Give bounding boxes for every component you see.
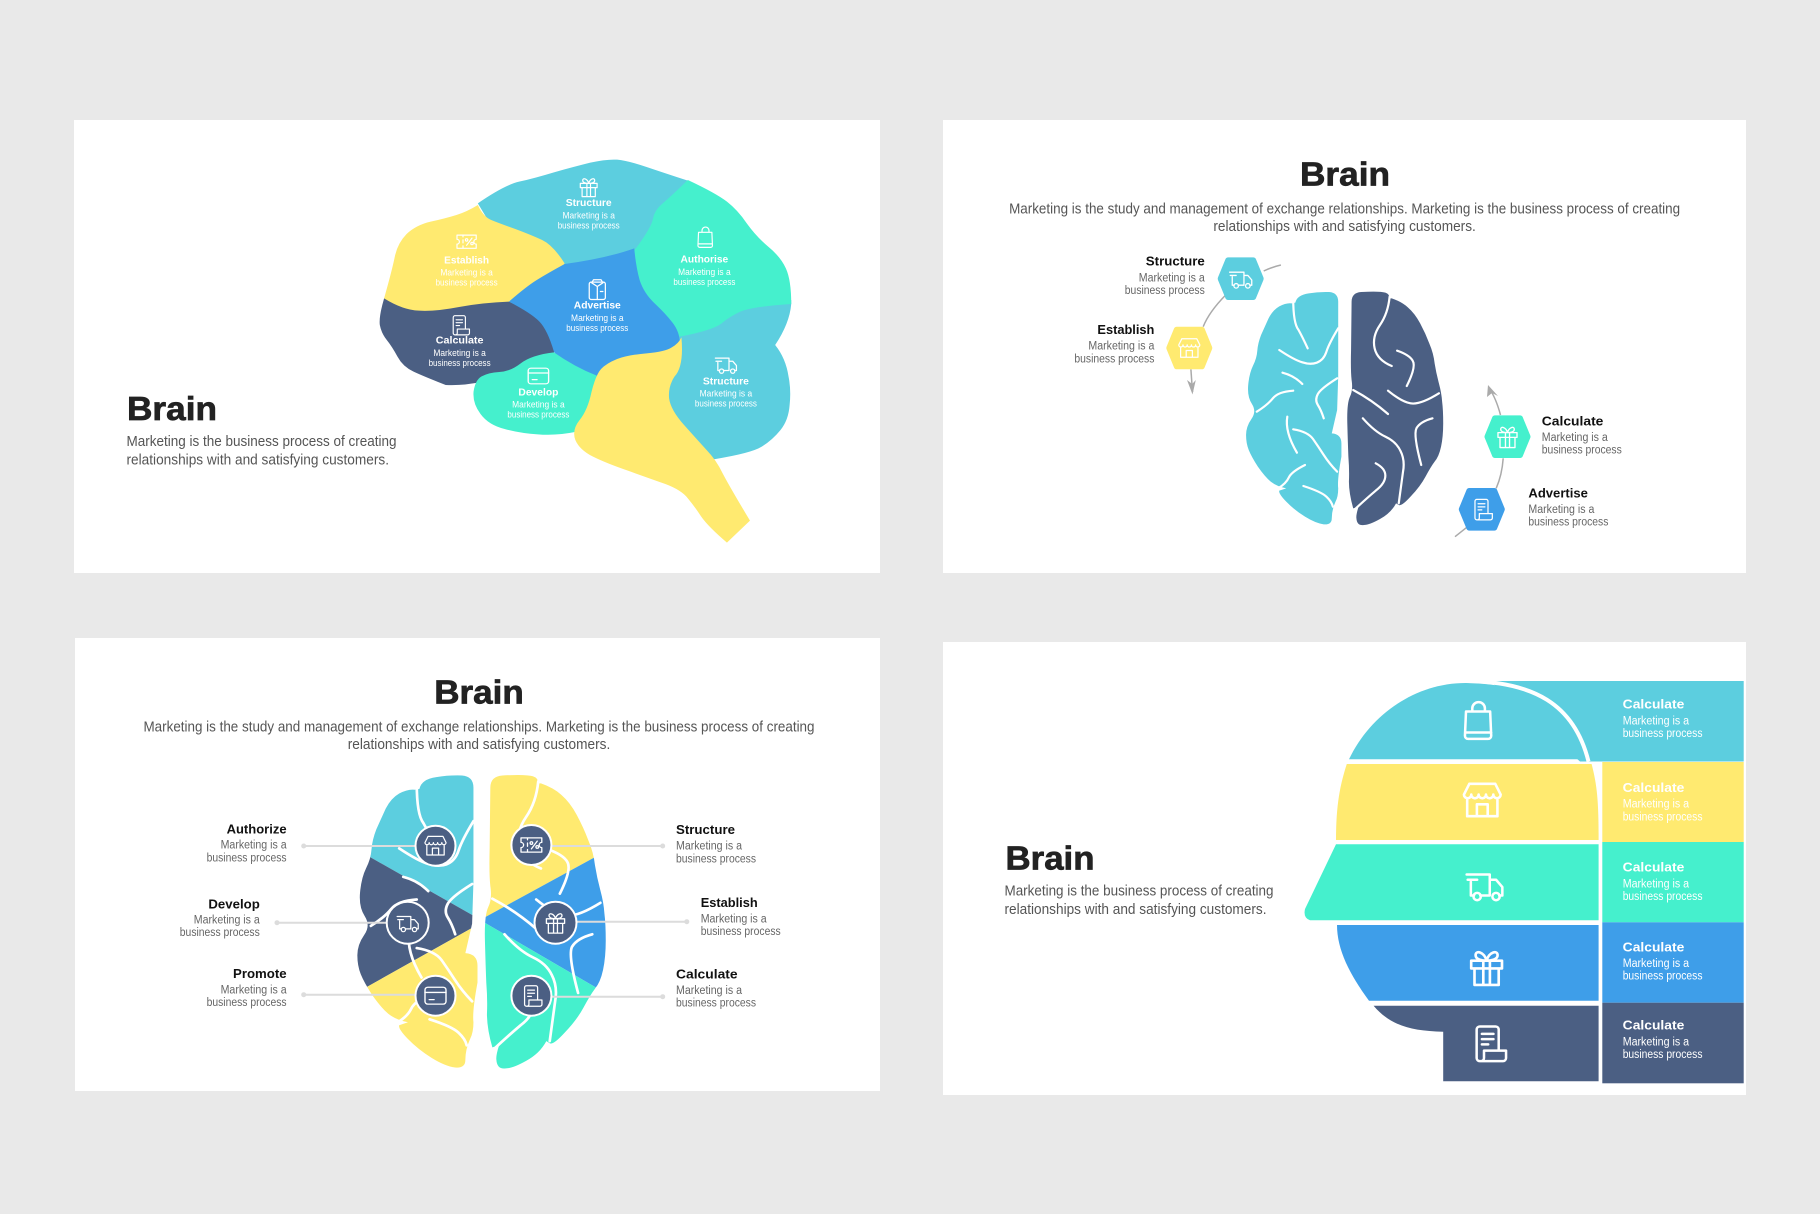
brain folds [371, 781, 600, 1047]
description [126, 434, 396, 468]
segment: Structure top: Structure [566, 197, 612, 209]
segment: Advertise: Advertise [574, 300, 621, 312]
icon: store [1464, 784, 1501, 816]
description: Marketing is the business process of creating [126, 434, 396, 450]
head band: yellow [1336, 764, 1599, 840]
segment: Establish: Establish [444, 254, 489, 266]
icon: scroll [1477, 1026, 1506, 1061]
icon: gift [1471, 952, 1502, 985]
segment: Authorise [673, 227, 736, 287]
text: block 4 [1623, 939, 1703, 983]
description [1009, 202, 1680, 235]
hexagon: Advertise scroll [1462, 491, 1502, 528]
label: Develop: Develop [208, 896, 260, 911]
label: Promote: Promote [233, 966, 287, 981]
label: Calculate [1542, 413, 1622, 457]
label: Promote: business process [207, 997, 287, 1009]
head band: blue [1337, 925, 1599, 1001]
text: block 2: business process [1623, 811, 1703, 823]
label: Establish: business process [701, 926, 781, 938]
head band: green [1305, 844, 1599, 920]
hexagon: Structure truck [1221, 260, 1261, 297]
label: Authorize: Marketing is a [221, 840, 287, 852]
label: Calculate: Calculate [1542, 413, 1603, 428]
segment: Authorise: Marketing is a [678, 267, 731, 277]
icon badge: gift [534, 902, 576, 944]
label: Develop [180, 896, 260, 939]
segment: Authorise: Authorise [681, 254, 728, 266]
label: Establish: Establish [701, 895, 758, 910]
label: Promote: Marketing is a [221, 984, 287, 996]
segment: Structure top: Marketing is a [562, 210, 615, 220]
label: Establish: Establish [1097, 322, 1154, 337]
label: Advertise [1528, 485, 1609, 529]
brain top view [1246, 292, 1443, 525]
label: Authorize [207, 821, 287, 864]
label: Calculate: business process [1542, 445, 1622, 457]
text: block 5: Marketing is a [1623, 1036, 1690, 1048]
icon: truck [1467, 874, 1502, 900]
text: block 2: Calculate [1623, 780, 1684, 795]
segment: Structure right: Structure [703, 375, 749, 387]
icon: bag [1465, 702, 1491, 739]
description: relationships with and satisfying customers. [1004, 902, 1266, 918]
icon badge: truck [387, 902, 429, 944]
segment: Structure right: Marketing is a [700, 389, 752, 399]
label: Structure: business process [1125, 285, 1205, 297]
icon badge: store [416, 826, 456, 866]
text: block 4: business process [1623, 971, 1703, 983]
text: block 5: business process [1623, 1049, 1703, 1061]
text: block 4: Calculate [1623, 939, 1684, 954]
label: Structure [676, 822, 756, 865]
segment: Establish: Marketing is a [440, 268, 493, 278]
text: block 5 [1623, 1018, 1703, 1061]
label: Authorize: Authorize [227, 821, 287, 836]
text: block 1: Marketing is a [1623, 715, 1690, 727]
segment: Calculate: business process [429, 358, 491, 368]
icon badge: scroll [511, 976, 551, 1016]
segment: Develop: business process [507, 410, 570, 420]
label: Promote [207, 966, 287, 1009]
text: block 3: Marketing is a [1623, 878, 1690, 890]
segment: Advertise [566, 280, 629, 333]
label: Calculate: Calculate [676, 967, 738, 982]
text: block 2: Marketing is a [1623, 799, 1690, 811]
description: relationships with and satisfying customers. [126, 452, 389, 468]
label: Advertise: Marketing is a [1528, 504, 1595, 516]
title: Brain [1006, 839, 1094, 876]
description: Marketing is the study and management of exchange relationships. Marketing is the business process of creating [144, 720, 814, 736]
text: block 3: Calculate [1623, 860, 1684, 875]
segment: Advertise: business process [566, 323, 629, 333]
right block: navy [1602, 1003, 1744, 1083]
segment: Calculate: Calculate [436, 335, 484, 347]
description [1004, 883, 1274, 918]
label: Structure: Marketing is a [676, 841, 743, 853]
text: block 5: Calculate [1623, 1018, 1684, 1033]
head band: cyan [1349, 681, 1588, 762]
right block: cyan [1490, 681, 1744, 762]
label: Establish: business process [1074, 353, 1155, 365]
hexagon: Establish store [1169, 330, 1209, 366]
segment: Develop [507, 368, 570, 420]
label: Establish: Marketing is a [701, 913, 767, 925]
panel: head profile [943, 642, 1746, 1095]
label: Calculate: business process [676, 998, 756, 1010]
segment: Advertise: Marketing is a [571, 313, 624, 323]
label: Authorize: business process [207, 852, 287, 864]
description: Marketing is the business process of creating [1004, 883, 1274, 899]
segment: Establish [436, 235, 498, 288]
right block: blue [1602, 922, 1744, 1003]
label: Establish [701, 895, 781, 938]
label: Advertise: Advertise [1528, 485, 1588, 500]
label: Structure [1125, 254, 1205, 297]
segment: Develop: Marketing is a [512, 400, 565, 410]
segment: Establish: business process [436, 278, 498, 288]
icon badge: ticket [511, 825, 551, 865]
title: Brain [127, 390, 217, 427]
label: Calculate: Marketing is a [676, 985, 743, 997]
label: Develop: business process [180, 927, 260, 939]
text: block 1: Calculate [1623, 696, 1684, 711]
label: Develop: Marketing is a [194, 915, 260, 927]
label: Establish: Marketing is a [1088, 341, 1155, 353]
right hemisphere bands [484, 775, 606, 1068]
hexagon: Calculate gift [1488, 418, 1528, 455]
brain side view shapes [380, 160, 791, 543]
leader lines [274, 844, 689, 999]
description [144, 720, 814, 753]
panel: coloured brain bands [75, 638, 880, 1091]
text: block 3 [1623, 860, 1703, 903]
label: Advertise: business process [1528, 517, 1609, 529]
label: Structure: business process [676, 853, 756, 865]
left hemisphere bands [357, 775, 478, 1068]
label: Calculate: Marketing is a [1542, 432, 1608, 444]
panel: two hemispheres [943, 120, 1746, 573]
label: Structure: Structure [676, 822, 735, 837]
label: Structure: Structure [1146, 254, 1205, 269]
description: relationships with and satisfying customers. [348, 737, 610, 753]
segment: Structure top: business process [558, 220, 620, 230]
title: Brain [434, 673, 524, 710]
description: Marketing is the study and management of exchange relationships. Marketing is the business process of creating [1009, 202, 1680, 218]
icon badge: card [416, 976, 456, 1016]
label: Structure: Marketing is a [1139, 272, 1205, 284]
right block: green [1602, 842, 1744, 922]
label: Calculate [676, 967, 756, 1010]
text: block 1: business process [1623, 728, 1703, 740]
segment: Calculate [429, 316, 491, 368]
text: block 1 [1623, 696, 1703, 740]
panel: brain side view [74, 120, 880, 573]
segment: Structure right [695, 358, 757, 409]
text: block 3: business process [1623, 891, 1703, 903]
right block: yellow [1602, 762, 1744, 842]
label: Establish [1074, 322, 1155, 365]
text: block 2 [1623, 780, 1703, 823]
description: relationships with and satisfying customers. [1213, 219, 1476, 235]
head band: navy [1374, 1006, 1599, 1081]
segment: Develop: Develop [518, 387, 558, 399]
title: Brain [1300, 155, 1390, 192]
segment: Structure top [558, 179, 620, 230]
segment: Structure right: business process [695, 399, 757, 409]
connector arcs and arrows [1187, 265, 1503, 537]
segment: Authorise: business process [673, 277, 736, 287]
segment: Calculate: Marketing is a [433, 348, 486, 358]
text: block 4: Marketing is a [1623, 958, 1690, 970]
